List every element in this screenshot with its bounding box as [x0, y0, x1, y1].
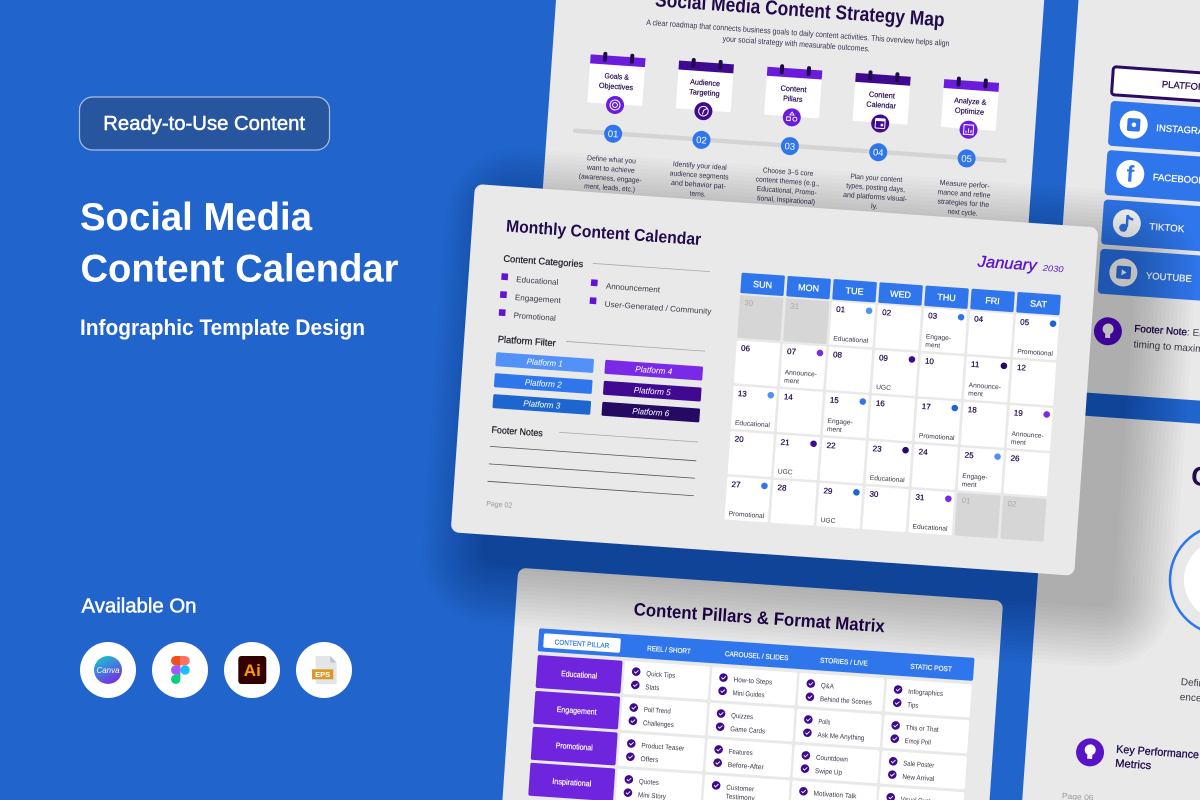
- day: 16: [869, 395, 915, 441]
- day: 13: Educational: [735, 420, 771, 429]
- weekday header: FRI: [985, 295, 1000, 306]
- weekday header: SAT: [1030, 298, 1048, 310]
- day: 01: 01: [836, 305, 846, 314]
- day: 08: 08: [833, 350, 843, 360]
- day: next 01: 01: [961, 496, 971, 506]
- step 2 marker: [692, 130, 711, 149]
- step 5 description: [936, 178, 991, 219]
- cell: sale poster, new arrival: New Arrival: [902, 774, 935, 783]
- step 5 description: next cycle.: [947, 207, 978, 218]
- panel: kpi metrics (partially visible): [1014, 413, 1200, 800]
- icon: adobe illustrator: [224, 642, 280, 698]
- cell: poll trend, challenges: Challenges: [643, 720, 674, 729]
- row label: educational: [536, 655, 623, 694]
- day: 22: [820, 438, 866, 483]
- day: 29: 29: [823, 486, 833, 496]
- platform filter buttons: [492, 352, 703, 423]
- day: 17: [915, 399, 961, 445]
- platform filter buttons: Platform 4: [635, 364, 673, 376]
- row label: inspirational: [528, 763, 615, 800]
- weekday header: [740, 273, 1061, 315]
- main title: [80, 196, 398, 291]
- day: 07: [780, 344, 826, 389]
- strategy intro: your social strategy with measurable outcomes.: [722, 34, 870, 54]
- category legend: User-Generated / Community: [604, 300, 712, 316]
- cell: this or that, emoji poll: [882, 715, 969, 753]
- day: 27: 27: [731, 480, 741, 489]
- weekday header: WED: [890, 289, 912, 300]
- cell: features, before-after: [705, 739, 792, 777]
- platform filter buttons: Platform 6: [632, 406, 670, 418]
- step 5 marker: 05: [961, 153, 972, 165]
- panel: platforms (partially visible): [1051, 0, 1200, 425]
- day: next 01: [954, 493, 1001, 539]
- cell: infographics, tips: Tips: [907, 702, 919, 710]
- day: 14: 14: [784, 392, 794, 402]
- step 5 card: [940, 76, 999, 141]
- step 2 card: [675, 57, 734, 122]
- step 2 card: Targeting: [689, 87, 720, 98]
- platform filter buttons: Platform 1: [526, 356, 563, 369]
- day: 17: 17: [922, 402, 932, 412]
- cell: countdown, swipe up: Countdown: [816, 755, 848, 764]
- day: 11: [964, 356, 1010, 402]
- step 5 card: Optimize: [955, 106, 984, 117]
- step 4 marker: [869, 143, 888, 162]
- day: 24: [912, 444, 958, 490]
- day: 04: 04: [974, 314, 984, 324]
- weekday header: MON: [798, 282, 819, 294]
- category legend: [498, 273, 713, 334]
- step 4 card: Calendar: [866, 100, 897, 111]
- day: 01: [829, 301, 875, 347]
- platform filter heading: [497, 334, 705, 360]
- platform filter buttons: Platform 3: [523, 398, 561, 411]
- cell: polls, ask me anything: [795, 709, 882, 747]
- weekday header: THU: [937, 292, 956, 303]
- panel: monthly content calendar: [451, 184, 1098, 576]
- category legend: Promotional: [513, 311, 556, 323]
- day: 05: [1013, 314, 1059, 360]
- day: 01: Educational: [833, 335, 869, 345]
- day: 19: ment: [1011, 439, 1026, 447]
- panel: content strategy map: [538, 0, 1046, 298]
- day: 27: Promotional: [728, 511, 765, 520]
- category legend: Announcement: [606, 282, 661, 295]
- day: 15: [823, 392, 869, 438]
- day: 09: 09: [879, 353, 889, 363]
- step 2 description: Identify your ideal: [673, 159, 727, 172]
- cell: quick tips, stats: [623, 661, 710, 700]
- cell: visual quote: [877, 786, 964, 800]
- row: youtube: YOUTUBE: [1146, 271, 1192, 285]
- day: 23: [866, 441, 912, 487]
- cell: quick tips, stats: Stats: [645, 684, 660, 692]
- content categories heading: [503, 254, 710, 279]
- cell: countdown, swipe up: [793, 745, 880, 783]
- weekday header: TUE: [845, 286, 864, 297]
- cell: quick tips, stats: Quick Tips: [646, 671, 676, 680]
- day: prev 31: 31: [790, 301, 800, 311]
- row: instagram: [1108, 101, 1200, 174]
- day: 07: Announce-: [784, 369, 817, 379]
- cell: sale poster, new arrival: [880, 751, 967, 789]
- day: 13: 13: [738, 389, 748, 399]
- row label: educational: Educational: [561, 669, 598, 681]
- cell: this or that, emoji poll: This or That: [905, 725, 939, 734]
- cell: this or that, emoji poll: Emoji Poll: [905, 738, 931, 747]
- day: 24: 24: [918, 447, 928, 457]
- cell: countdown, swipe up: Swipe Up: [815, 768, 842, 777]
- day: 06: 06: [741, 344, 751, 353]
- step 2 description: [668, 159, 730, 200]
- day: 15: ment: [827, 426, 842, 434]
- cell: how-to steps, mini guides: [710, 667, 797, 706]
- step 5 description: mance and refine: [937, 187, 991, 200]
- step 1 card: [587, 51, 646, 116]
- cell: poll trend, challenges: [620, 697, 707, 736]
- cell: polls, ask me anything: Polls: [818, 719, 831, 727]
- cell: product teaser, offers: Offers: [640, 756, 659, 764]
- cell: quotes, mini story: Quotes: [639, 779, 660, 787]
- day: prev 31: [783, 298, 829, 344]
- day: 29: UGC: [820, 517, 836, 525]
- step 3 card: Pillars: [783, 94, 803, 104]
- day: 31: Educational: [912, 523, 948, 533]
- day: 27: [724, 477, 771, 522]
- day: 05: 05: [1020, 318, 1030, 327]
- platform filter buttons: Platform 2: [524, 377, 562, 390]
- icon: eps file: EPS: [315, 670, 330, 679]
- day: 26: [1004, 450, 1050, 496]
- step 4 card: Content: [869, 90, 896, 101]
- day: 02: [875, 305, 921, 351]
- step 3 description: tional, Inspirational): [757, 193, 815, 206]
- day: 30: 30: [869, 489, 879, 499]
- cell: how-to steps, mini guides: Mini Guides: [732, 690, 765, 699]
- footer note icon: light bulb: [1093, 316, 1123, 346]
- icon: eps file: [296, 642, 352, 698]
- step 3 description: [754, 165, 820, 207]
- step 1 description: want to achieve: [586, 163, 635, 175]
- day: 30: [862, 486, 909, 532]
- day: 03: ment: [925, 342, 940, 350]
- matrix title: Content Pillars & Format Matrix: [633, 599, 885, 636]
- step 1 description: ment, leads, etc.): [584, 181, 635, 194]
- step 2 description: and behavior pat-: [671, 178, 727, 191]
- kpi label: Key Performance: [1116, 744, 1199, 761]
- day: 28: [770, 480, 817, 526]
- day: prev 30: [737, 295, 783, 341]
- cell: infographics, tips: Infographics: [908, 689, 944, 698]
- cell: quizzes, game cards: [708, 703, 795, 741]
- day: next 02: 02: [1007, 499, 1017, 509]
- step 2 card: Audience: [690, 77, 720, 88]
- day: 25: 25: [964, 451, 974, 460]
- cell: product teaser, offers: Product Teaser: [641, 743, 685, 753]
- cell: q&a, behind the scenes: Behind the Scenes: [820, 696, 872, 707]
- badge: ready-to-use content: Ready-to-Use Content: [103, 113, 305, 135]
- panel: content pillars and format matrix: [498, 568, 1003, 800]
- day: 03: 03: [928, 311, 938, 321]
- step 3 marker: 03: [784, 141, 795, 153]
- main title: Social Media: [80, 196, 312, 239]
- matrix header bar: [538, 628, 975, 681]
- day: 02: 02: [882, 308, 892, 318]
- step 1 marker: [604, 124, 623, 143]
- day: 03: Engage-: [926, 334, 951, 342]
- panel background: [538, 0, 1046, 298]
- cell: how-to steps, mini guides: How-to Steps: [733, 677, 773, 686]
- cell: q&a, behind the scenes: Q&A: [821, 683, 834, 691]
- row: facebook: f: [1126, 160, 1135, 187]
- step 1 description: (awareness, engage-: [578, 171, 643, 185]
- day: 15: 15: [830, 395, 840, 405]
- day: 25: [958, 447, 1004, 493]
- calendar panel shadow: [417, 144, 1200, 672]
- day: 05: Promotional: [1017, 348, 1054, 358]
- step 1 card: Goals &: [604, 71, 629, 82]
- step 5 marker: [957, 149, 976, 168]
- day: 28: 28: [777, 483, 787, 493]
- day: 12: 12: [1017, 363, 1027, 373]
- step 3 description: Choose 3–5 core: [762, 165, 814, 178]
- cell: quizzes, game cards: Quizzes: [731, 713, 754, 721]
- step 3 description: Educational, Promo-: [757, 184, 818, 197]
- cell: poll trend, challenges: Poll Trend: [644, 707, 671, 716]
- day: 07: 07: [787, 347, 797, 357]
- platform filter buttons: Platform 5: [633, 385, 671, 397]
- step 4 description: and platforms visual-: [843, 190, 908, 203]
- month label: 2030: [1041, 263, 1064, 274]
- day: 03: [921, 308, 967, 354]
- icon: figma: [152, 642, 208, 698]
- day: 06: [734, 340, 780, 386]
- day: 18: 18: [968, 405, 978, 415]
- matrix header bar: REEL / SHORT: [647, 646, 692, 656]
- cell: q&a, behind the scenes: [797, 673, 885, 711]
- day: 22: 22: [826, 441, 836, 451]
- badge: ready-to-use content: [80, 97, 330, 150]
- available on heading: Available On: [82, 596, 196, 618]
- row: youtube: [1097, 249, 1200, 321]
- day: 23: Educational: [869, 475, 905, 484]
- day: 31: 31: [915, 493, 925, 502]
- platform filter heading: Platform Filter: [497, 334, 556, 349]
- day: 29: [816, 483, 863, 529]
- step 1 description: Define what you: [587, 153, 636, 166]
- row label: inspirational: Inspirational: [552, 777, 592, 788]
- subtitle: Infographic Template Design: [80, 315, 365, 340]
- cell: features, before-after: Before-After: [727, 762, 765, 771]
- matrix header bar: CONTENT PILLAR: [554, 639, 609, 650]
- day: 25: Engage-: [962, 473, 988, 482]
- step 4 card: [852, 69, 911, 134]
- day: 09: UGC: [876, 384, 891, 392]
- category legend: Engagement: [515, 293, 562, 305]
- footer notes: Footer Notes: [491, 425, 543, 439]
- day: prev 30: 30: [744, 298, 754, 308]
- day: 25: ment: [961, 481, 977, 489]
- step 5 description: strategies for the: [937, 197, 989, 209]
- day: 08: [826, 347, 872, 393]
- weekday header: SUN: [753, 279, 772, 290]
- strategy intro: A clear roadmap that connects business goals to daily content activities. This overview helps align: [646, 18, 950, 48]
- cell: sale poster, new arrival: Sale Poster: [903, 761, 935, 770]
- kpi description: [1179, 677, 1200, 705]
- month label: January: [976, 254, 1038, 275]
- row label: promotional: [531, 727, 618, 765]
- day: 19: Announce-: [1011, 431, 1044, 440]
- panel background: [1051, 0, 1200, 425]
- panel background: [1014, 413, 1200, 800]
- step 2 marker: 02: [696, 135, 707, 147]
- row: tiktok: [1101, 199, 1200, 272]
- left column: hero text: [80, 97, 398, 698]
- step 4 description: [842, 171, 909, 213]
- step 1 card: Objectives: [599, 81, 634, 92]
- step 1 description: [578, 153, 644, 194]
- kpi icon: light bulb: [1075, 737, 1105, 767]
- step 2 description: terns.: [690, 189, 706, 199]
- day: 10: [918, 353, 964, 399]
- step 5 card: Analyze &: [954, 96, 987, 107]
- panel background: [498, 568, 1003, 800]
- day: 18: [961, 402, 1007, 448]
- day: 12: [1010, 360, 1056, 406]
- cell: customer testimony: [703, 775, 790, 800]
- day: 13: [731, 386, 777, 432]
- calendar title: Monthly Content Calendar: [505, 216, 702, 249]
- day: 15: Engage-: [827, 418, 853, 427]
- kpi label: Metrics: [1115, 758, 1152, 772]
- step 4 description: types, posting days,: [846, 181, 905, 194]
- panel background: [451, 184, 1098, 576]
- row: facebook: [1104, 150, 1200, 223]
- matrix header bar: STORIES / LIVE: [820, 657, 868, 668]
- month label: [976, 254, 1064, 277]
- day: 26: 26: [1010, 454, 1020, 463]
- day: 17: Promotional: [919, 433, 955, 442]
- category legend: Educational: [516, 275, 559, 287]
- day: 21: 21: [780, 438, 790, 447]
- cell: customer testimony: Customer: [726, 785, 755, 793]
- step 4 description: Plan your content: [850, 172, 903, 184]
- footer note text: [1133, 324, 1200, 360]
- cell: quizzes, game cards: Game Cards: [730, 726, 766, 735]
- kpi label: [1115, 744, 1199, 775]
- step 3 card: Content: [780, 83, 808, 94]
- day: 10: 10: [925, 357, 935, 366]
- row: tiktok: TIKTOK: [1149, 222, 1185, 235]
- row label: engagement: Engagement: [556, 705, 598, 717]
- step 2 description: audience segments: [669, 168, 729, 181]
- icon: canva: [80, 642, 136, 698]
- footer notes: [488, 425, 698, 496]
- day: 11: ment: [968, 390, 983, 398]
- day: 21: [774, 434, 820, 480]
- day: 31: [908, 489, 955, 535]
- day: 14: [777, 389, 823, 435]
- kpi ring: [1166, 521, 1200, 639]
- row label: promotional: Promotional: [555, 741, 593, 752]
- cell: quotes, mini story: [616, 769, 703, 800]
- step 4 description: ly.: [871, 201, 878, 211]
- timeline track: [573, 128, 1007, 163]
- day: 11: Announce-: [968, 382, 1001, 391]
- icon: adobe illustrator: Ai: [244, 661, 261, 680]
- cell: polls, ask me anything: Ask Me Anything: [817, 732, 865, 742]
- step 3 card: [763, 63, 823, 128]
- platform header box: [1111, 67, 1200, 116]
- day: 23: 23: [872, 444, 882, 454]
- day: 19: 19: [1014, 408, 1024, 418]
- day: 04: [967, 311, 1013, 357]
- row label: engagement: [533, 691, 620, 730]
- cell: infographics, tips: [885, 679, 972, 717]
- icon: canva: Canva: [96, 666, 120, 675]
- content categories heading: Content Categories: [503, 254, 584, 270]
- day: 11: 11: [971, 360, 980, 369]
- day: 21: UGC: [778, 468, 793, 476]
- page number: Page 02: [486, 499, 512, 510]
- step 3 description: content themes (e.g.,: [755, 174, 820, 188]
- step 5 description: Measure perfor-: [939, 178, 990, 190]
- step 3 marker: [780, 136, 799, 156]
- step 4 marker: 04: [873, 147, 884, 159]
- day: next 02: [1000, 496, 1047, 542]
- cell: product teaser, offers: [618, 733, 705, 771]
- day: 07: ment: [784, 377, 799, 385]
- main title: Content Calendar: [80, 248, 398, 291]
- matrix header bar: CAROUSEL / SLIDES: [725, 651, 789, 662]
- day: 09: [872, 350, 918, 396]
- matrix header bar: STATIC POST: [910, 664, 953, 673]
- day: 20: [728, 431, 774, 477]
- day: 19: [1007, 405, 1053, 451]
- day: 20: 20: [734, 434, 744, 444]
- step 1 marker: 01: [607, 129, 619, 140]
- day: 16: 16: [876, 399, 886, 408]
- cell: features, before-after: Features: [728, 749, 753, 757]
- cell: motivation talk: [790, 781, 877, 800]
